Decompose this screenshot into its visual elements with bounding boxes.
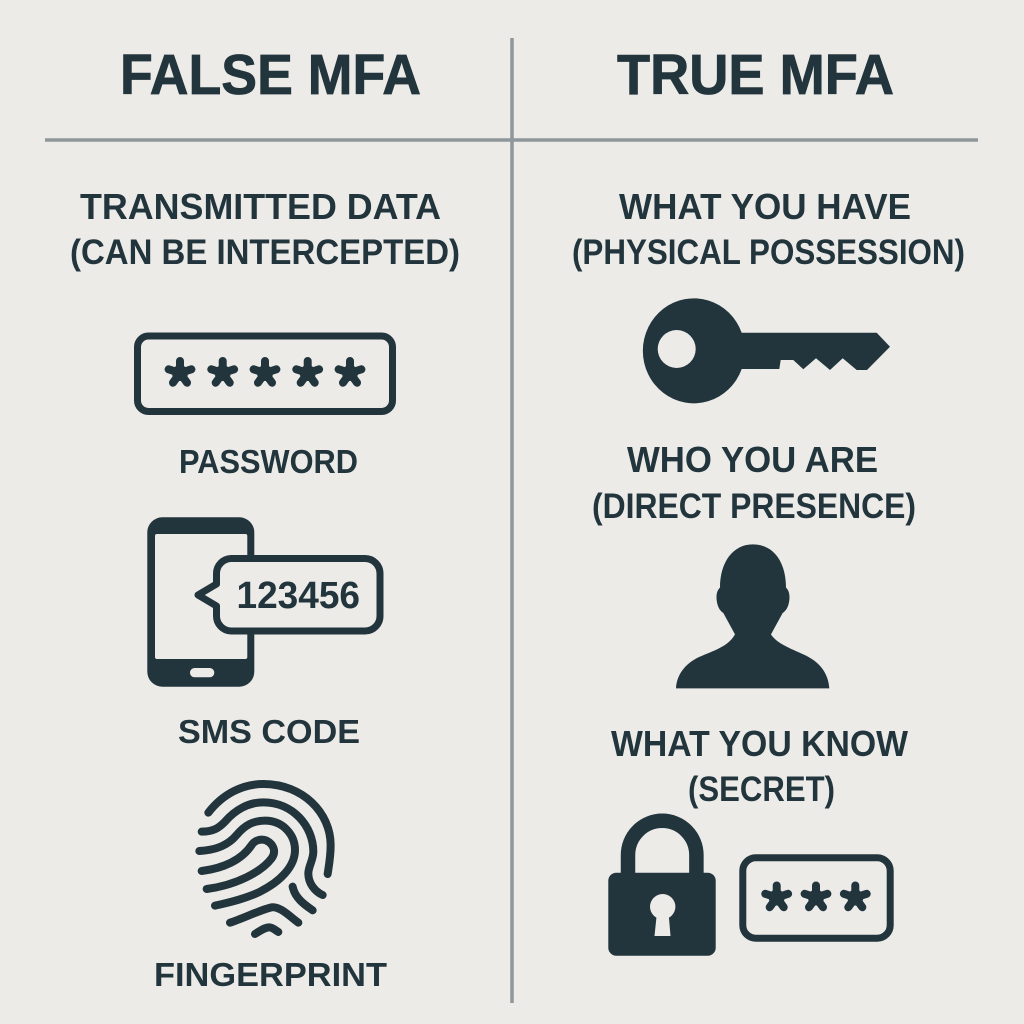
heading: what you have: (PHYSICAL POSSESSION) bbox=[572, 233, 965, 272]
label: password: PASSWORD bbox=[179, 443, 358, 480]
heading: transmitted data bbox=[70, 186, 460, 272]
icon: padlock bbox=[608, 821, 716, 956]
heading: who you are: (DIRECT PRESENCE) bbox=[592, 487, 916, 526]
heading: what you know bbox=[611, 723, 908, 809]
icon: person silhouette bbox=[676, 544, 829, 688]
icon: secret code field bbox=[743, 858, 890, 938]
panel: false MFA column bbox=[70, 186, 460, 993]
label: SMS code: SMS CODE bbox=[178, 713, 360, 750]
icon: phone with SMS bubble: 123456 bbox=[236, 575, 360, 617]
label: fingerprint: FINGERPRINT bbox=[154, 956, 387, 993]
icon: phone with SMS bubble bbox=[147, 517, 380, 687]
heading: what you have: WHAT YOU HAVE bbox=[619, 186, 911, 227]
heading: transmitted data: (CAN BE INTERCEPTED) bbox=[70, 233, 460, 272]
heading: transmitted data: TRANSMITTED DATA bbox=[80, 186, 441, 227]
panel: true MFA column bbox=[572, 186, 965, 956]
icon: password field bbox=[138, 336, 392, 412]
heading: what you know: (SECRET) bbox=[688, 770, 835, 809]
heading: who you are: WHO YOU ARE bbox=[627, 439, 878, 480]
heading: what you know: WHAT YOU KNOW bbox=[611, 723, 908, 764]
icon: key bbox=[643, 298, 890, 403]
title: True MFA: TRUE MFA bbox=[617, 43, 894, 107]
icon: fingerprint bbox=[199, 784, 331, 934]
title: False MFA: FALSE MFA bbox=[120, 43, 421, 107]
heading: what you have bbox=[572, 186, 965, 272]
heading: who you are bbox=[592, 439, 916, 526]
